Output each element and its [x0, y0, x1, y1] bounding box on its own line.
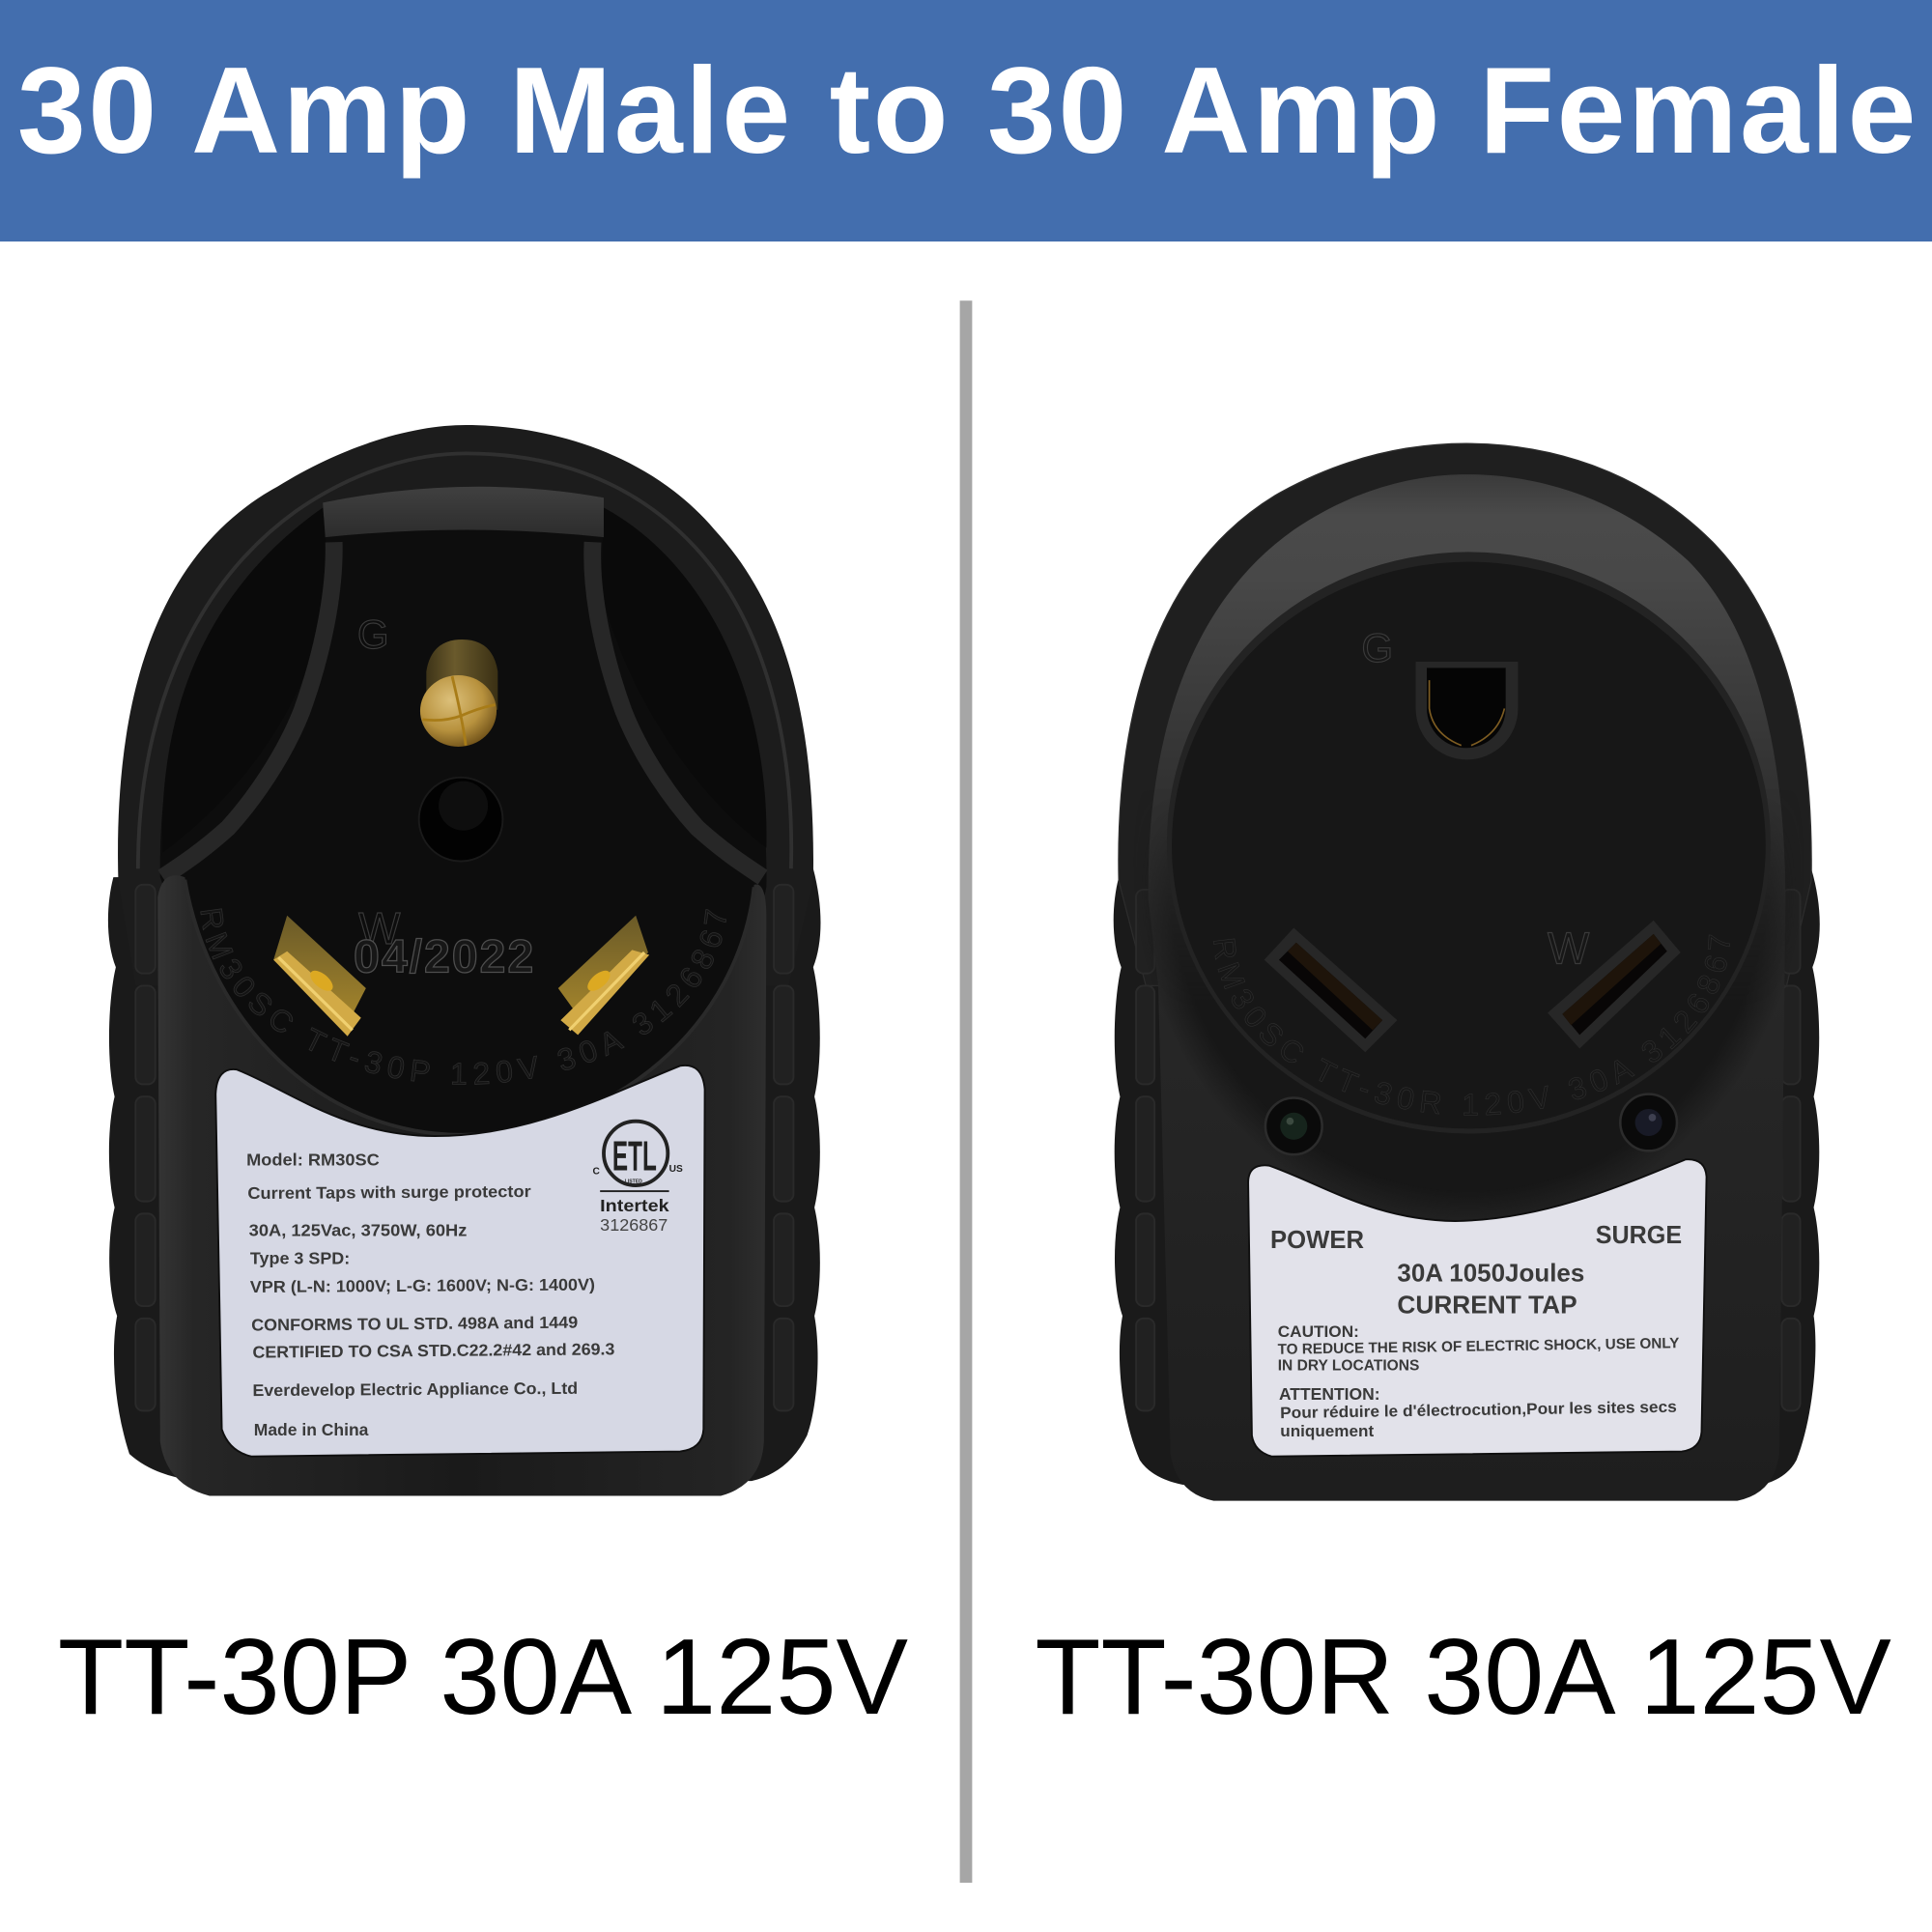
warning label: Pour réduire le d'électrocution,Pour les sites secs — [1280, 1398, 1677, 1422]
ETL mark: LISTED — [625, 1179, 642, 1184]
warning label: 30A 1050Joules — [1397, 1261, 1584, 1288]
rating label: CERTIFIED TO CSA STD.C22.2#42 and 269.3 — [252, 1339, 615, 1362]
ETL mark — [593, 1122, 683, 1235]
letter G: G — [357, 611, 389, 657]
letter G: G — [1361, 625, 1393, 670]
rating label: CONFORMS TO UL STD. 498A and 1449 — [251, 1313, 578, 1335]
caption: male: TT-30P 30A 125V — [58, 1617, 908, 1737]
rating label: Everdevelop Electric Appliance Co., Ltd — [252, 1378, 578, 1400]
title: 30 Amp Male to 30 Amp Female — [17, 43, 1916, 180]
right blade — [558, 916, 649, 1035]
socket face — [1172, 562, 1766, 1128]
right recess — [601, 508, 767, 848]
moulded text ring: RM30SC TT-30P 120V 30A 3126867 — [200, 908, 726, 1085]
rating label: VPR (L-N: 1000V; L-G: 1600V; N-G: 1400V) — [250, 1275, 595, 1296]
warning label: uniquement — [1280, 1422, 1375, 1440]
ETL mark: C — [593, 1167, 601, 1178]
right slot — [1548, 921, 1681, 1048]
left ridge — [162, 542, 334, 877]
warning label: POWER — [1270, 1227, 1364, 1254]
rating label: Made in China — [254, 1420, 369, 1439]
top band — [323, 487, 604, 537]
power LED — [1265, 1097, 1322, 1154]
front housing — [157, 875, 766, 1495]
ETL mark: Intertek — [600, 1196, 669, 1215]
side ribs — [1136, 890, 1801, 1410]
letter W: W — [1548, 923, 1590, 973]
moulded text ring: RM30SC TT-30R 120V 30A 3126867 — [1213, 935, 1730, 1116]
panel: female receptacle — [1113, 442, 1820, 1501]
ground slot — [1416, 662, 1518, 759]
center divider — [960, 300, 972, 1883]
caption: female: TT-30R 30A 125V — [1035, 1617, 1891, 1737]
ground pin — [420, 639, 497, 747]
surge LED — [1620, 1094, 1677, 1151]
ETL mark: 3126867 — [600, 1215, 668, 1235]
rating label: Model: RM30SC — [246, 1151, 380, 1170]
side ribs — [135, 885, 793, 1410]
face rim — [185, 880, 754, 1135]
rating label: 30A, 125Vac, 3750W, 60Hz — [249, 1220, 467, 1239]
warning label: SURGE — [1596, 1222, 1682, 1249]
left slot — [1264, 927, 1397, 1052]
plug face — [160, 502, 766, 1136]
warning label: CAUTION: — [1278, 1322, 1359, 1341]
warning label: IN DRY LOCATIONS — [1278, 1357, 1419, 1374]
right ridge — [592, 542, 763, 877]
date code: 04/2022 — [354, 930, 533, 982]
left blade — [273, 916, 366, 1037]
hole with screw — [419, 778, 502, 862]
left recess — [162, 508, 330, 853]
ETL mark: US — [669, 1164, 683, 1175]
warning label: ATTENTION: — [1279, 1384, 1380, 1404]
rating label — [215, 1065, 705, 1457]
rating label: Type 3 SPD: — [250, 1249, 350, 1268]
face rim — [1167, 552, 1771, 1133]
warning label: CURRENT TAP — [1397, 1293, 1577, 1320]
ETL mark: ETL — [612, 1134, 657, 1180]
halo under face — [1159, 867, 1777, 1206]
panel: male plug — [108, 425, 821, 1495]
warning label: TO REDUCE THE RISK OF ELECTRIC SHOCK, USE ONLY — [1277, 1335, 1680, 1358]
warning label — [1248, 1159, 1707, 1457]
header band — [0, 0, 1932, 242]
inner dome — [1149, 474, 1785, 1501]
letter W: W — [358, 903, 401, 953]
rating label: Current Taps with surge protector — [247, 1181, 531, 1203]
